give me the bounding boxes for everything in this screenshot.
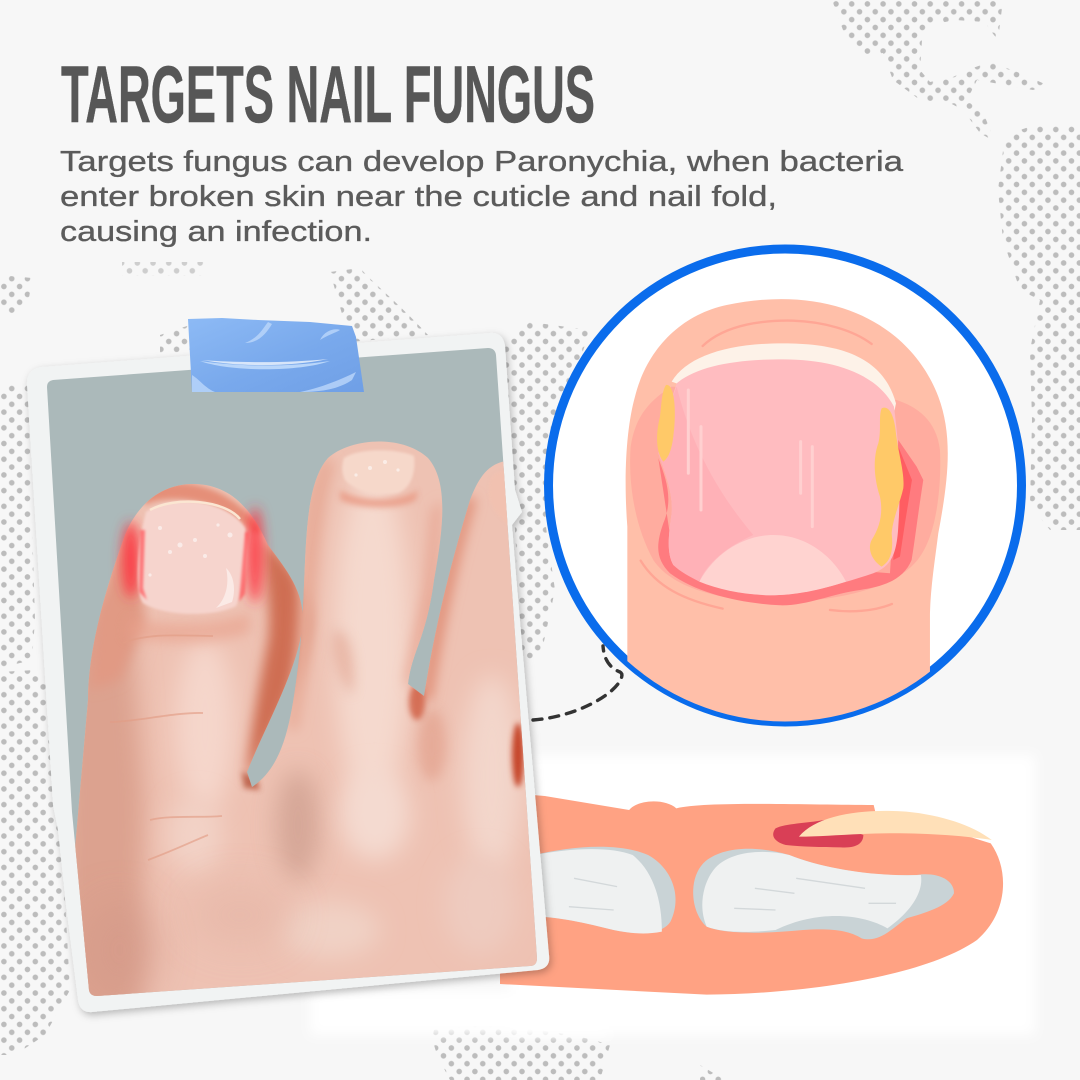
pus left: [657, 385, 675, 462]
magnified toe illustration: [626, 299, 948, 740]
toe skin: [626, 299, 948, 740]
finger cross-section illustration: [500, 794, 1003, 995]
blue tape: [188, 318, 364, 392]
description text: enter broken skin near the cuticle and nail fold,: [60, 181, 777, 213]
deep red right edge: [893, 447, 912, 560]
pus right: [870, 408, 904, 567]
bare skin of foot and toes: [75, 442, 537, 996]
photo card with toes: [27, 330, 570, 1030]
bone: distal phalanx: [569, 849, 954, 939]
magnified nail circle: [548, 249, 1022, 740]
red glow around nail: [122, 507, 263, 603]
white panel behind finger cross-section: [310, 755, 1035, 1035]
toenail: [799, 811, 992, 840]
dashed connector line: [533, 646, 622, 720]
skin creases: [641, 321, 892, 611]
third toe shading: [420, 495, 522, 875]
description text: [60, 146, 903, 248]
bone: middle phalanx: [534, 847, 676, 933]
red nail fold: [658, 440, 923, 605]
photo backdrop: [47, 348, 537, 996]
title: TARGETS NAIL FUNGUS: [61, 50, 595, 140]
white torn-edge frame: [27, 333, 549, 1012]
inflamed skin halo: [630, 387, 940, 602]
nail lunula: [699, 535, 846, 595]
description text: Targets fungus can develop Paronychia, when bacteria: [60, 146, 903, 178]
third toe nail: [504, 474, 508, 522]
finger body: [500, 794, 1003, 995]
big toe shading: [60, 483, 310, 1020]
nail plate: [658, 359, 900, 595]
second toe nail: [342, 450, 414, 494]
photo contents: [47, 348, 537, 996]
foot shading: [127, 686, 525, 990]
white nail tip: [672, 343, 896, 413]
nail highlights: [688, 390, 812, 527]
nail bed infection: [773, 820, 863, 847]
nail shading: [658, 387, 753, 582]
second toe shading: [288, 454, 442, 810]
description text: causing an infection.: [60, 216, 372, 248]
skin creases: [124, 634, 222, 861]
big toe nail: [138, 501, 249, 614]
